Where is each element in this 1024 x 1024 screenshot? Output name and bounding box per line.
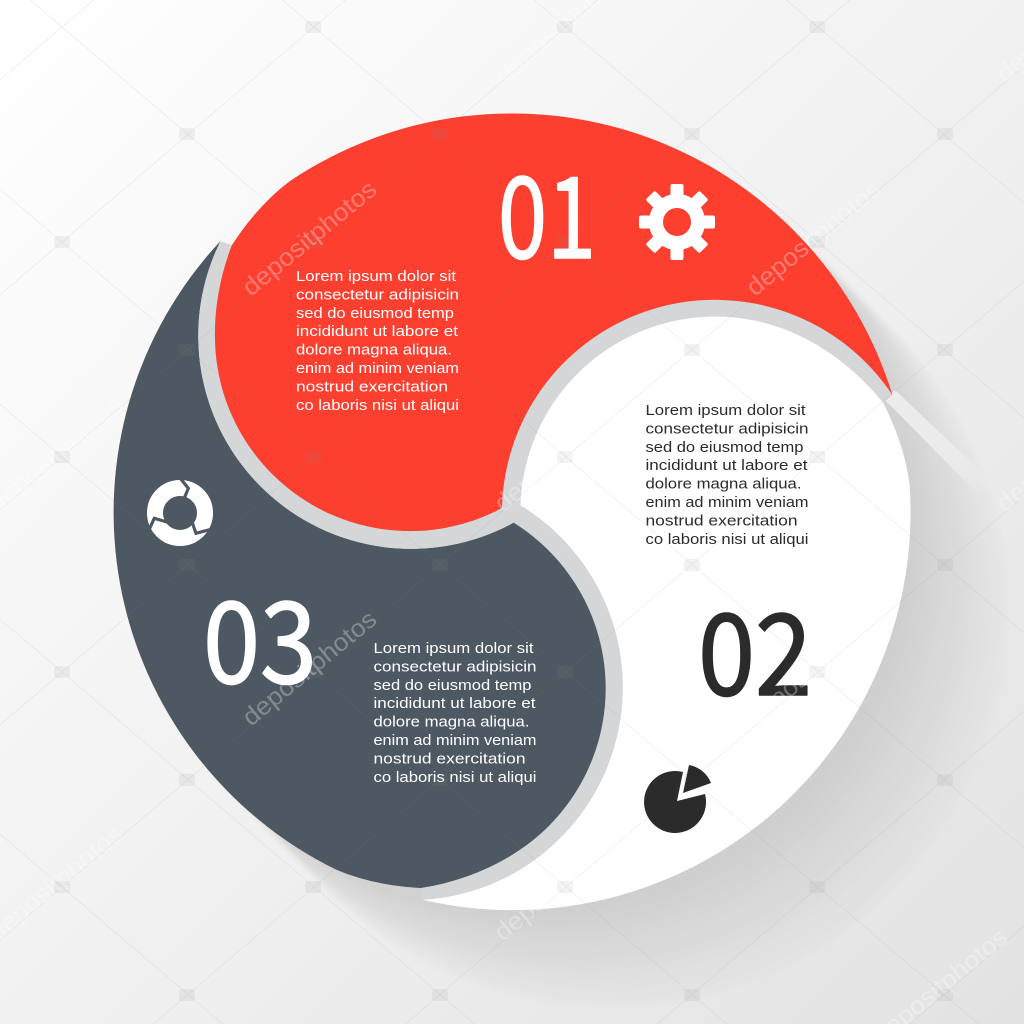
text block 01: sed do eiusmod temp: [296, 305, 454, 322]
text block 02: dolore magna aliqua.: [646, 476, 802, 493]
red segment fold band: [198, 113, 892, 549]
text block 03: Lorem ipsum dolor sit: [374, 640, 534, 657]
text block 01: co laboris nisi ut aliqui: [296, 397, 459, 414]
text block 02: nostrud exercitation: [646, 512, 798, 529]
watermark text: depositphotos: [237, 605, 382, 732]
icon: pie chart: [644, 765, 711, 833]
text block 03: sed do eiusmod temp: [374, 677, 532, 694]
red segment shape: [215, 113, 892, 531]
panel 03: dark segment: [0, 164, 701, 983]
text block 03: co laboris nisi ut aliqui: [374, 769, 536, 786]
text block 03: dolore magna aliqua.: [374, 714, 530, 731]
text block 03: [374, 640, 536, 786]
icon: cycle arrows: [148, 478, 212, 538]
text block 03: enim ad minim veniam: [374, 732, 536, 749]
light streak from the red tip: [884, 390, 992, 496]
text block 01: dolore magna aliqua.: [296, 342, 452, 359]
watermark text: depositphotos: [741, 175, 886, 302]
text block 02: incididunt ut labore et: [646, 457, 808, 474]
text block 02: enim ad minim veniam: [646, 494, 808, 511]
dark segment shape: [0, 173, 677, 969]
text block 01: enim ad minim veniam: [296, 360, 459, 377]
text block 01: nostrud exercitation: [296, 378, 448, 395]
text block 03: nostrud exercitation: [374, 750, 526, 767]
number 03: 03: [203, 552, 317, 716]
text block 01: Lorem ipsum dolor sit: [296, 268, 457, 285]
text block 01: [296, 268, 459, 414]
number 01: 01: [498, 127, 596, 291]
text block 01: incididunt ut labore et: [296, 323, 459, 340]
panel 01: red segment: [198, 113, 892, 549]
text block 02: sed do eiusmod temp: [646, 439, 804, 456]
number 02: 02: [698, 564, 812, 728]
white segment shape: [305, 245, 1006, 1024]
text block 02: [646, 402, 808, 548]
white segment fold band: [290, 222, 1014, 1024]
watermark text: depositphotos: [489, 820, 634, 947]
text block 03: incididunt ut labore et: [374, 695, 536, 712]
icon: gear: [639, 184, 715, 260]
panel 02: white segment: [290, 222, 1014, 1024]
text block 02: Lorem ipsum dolor sit: [646, 402, 806, 419]
long drop shadow of the circle: [121, 121, 1008, 1008]
watermark text: depositphotos: [237, 175, 382, 302]
text block 02: co laboris nisi ut aliqui: [646, 531, 808, 548]
watermark text: depositphotos: [741, 605, 886, 732]
text block 03: consectetur adipisicin: [374, 658, 536, 675]
text block 01: consectetur adipisicin: [296, 286, 459, 303]
text block 02: consectetur adipisicin: [646, 420, 808, 437]
watermark text: depositphotos: [489, 391, 634, 518]
dark segment fold band: [0, 164, 701, 983]
